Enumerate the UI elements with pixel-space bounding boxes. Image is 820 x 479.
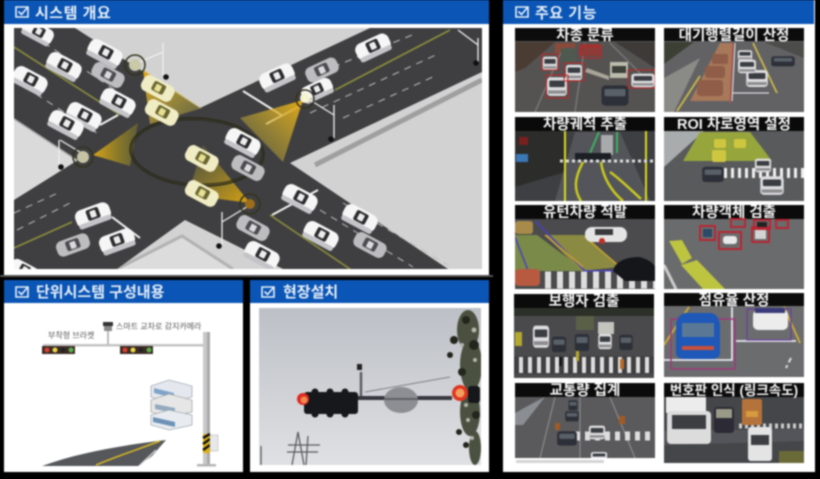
title: 점유율 산정 (699, 292, 769, 309)
title: 교통량 집계 (550, 382, 620, 399)
label: attached bracket: 부착형 브라켓 (48, 330, 94, 340)
camera cones (143, 70, 202, 124)
heading: main functions: 주요 기능 (535, 5, 597, 22)
small caption text (516, 460, 604, 463)
panel: system overview (0, 0, 493, 284)
right signal (452, 385, 468, 401)
title: 보행자 검출 (549, 293, 619, 310)
icon: camera (103, 322, 113, 345)
heading: site installation: 현장설치 (283, 284, 338, 301)
panel: main functions (503, 0, 815, 472)
title: 대기행렬길이 산정 (679, 27, 789, 44)
signal head (304, 388, 358, 418)
roads (14, 28, 482, 269)
thumbnail: vehicle classification (514, 26, 656, 113)
photo: installed traffic signal (258, 307, 482, 466)
title: 유턴차량 적발 (543, 204, 627, 221)
label: smart intersection camera: 스마트 교차로 감지카메라 (116, 321, 202, 331)
wire (365, 377, 450, 392)
heading: main functions (503, 0, 814, 24)
thumbnail: U-turn vehicle detection (514, 204, 656, 290)
title: ROI 차로영역 설정 (677, 116, 791, 133)
detection ring (128, 115, 266, 189)
panel: site installation (250, 280, 489, 472)
traffic light left (42, 346, 75, 354)
thumbnail: license plate recognition (662, 382, 806, 464)
heading: unit system composition: 단위시스템 구성내용 (36, 284, 165, 301)
icon: server stack (151, 380, 192, 430)
vehicles (8, 17, 394, 284)
tree (447, 310, 482, 465)
title: 차량궤적 추출 (543, 116, 627, 133)
road markings (14, 28, 450, 269)
title: 번호판 인식 (링크속도) (670, 383, 798, 398)
traffic light right (120, 346, 153, 354)
heading: system overview (4, 0, 489, 24)
thumbnail: vehicle trajectory extraction (514, 116, 656, 202)
heading: system overview: 시스템 개요 (35, 5, 111, 22)
illustration: isometric intersection (13, 27, 483, 270)
thumbnail: pedestrian detection (512, 292, 656, 379)
thumbnail: traffic counting (514, 382, 656, 459)
oval sign (384, 387, 418, 413)
power tower (261, 432, 320, 465)
heading: unit system composition (4, 280, 243, 303)
title: 차종 분류 (556, 27, 614, 44)
thumbnail: ROI lane area setup (662, 116, 806, 202)
road illustration (42, 440, 166, 466)
title: 차량객체 검출 (692, 204, 776, 221)
thumbnail: vehicle object detection (662, 204, 806, 290)
heading: site installation (250, 280, 489, 303)
cameras and poles (58, 30, 479, 249)
gantry pole (43, 332, 218, 466)
thumbnail: occupancy calculation (662, 292, 806, 378)
thumbnail: queue length estimation (662, 26, 806, 113)
mast arm (355, 396, 452, 400)
camera pole (360, 372, 362, 396)
panel: unit system composition (4, 280, 243, 472)
